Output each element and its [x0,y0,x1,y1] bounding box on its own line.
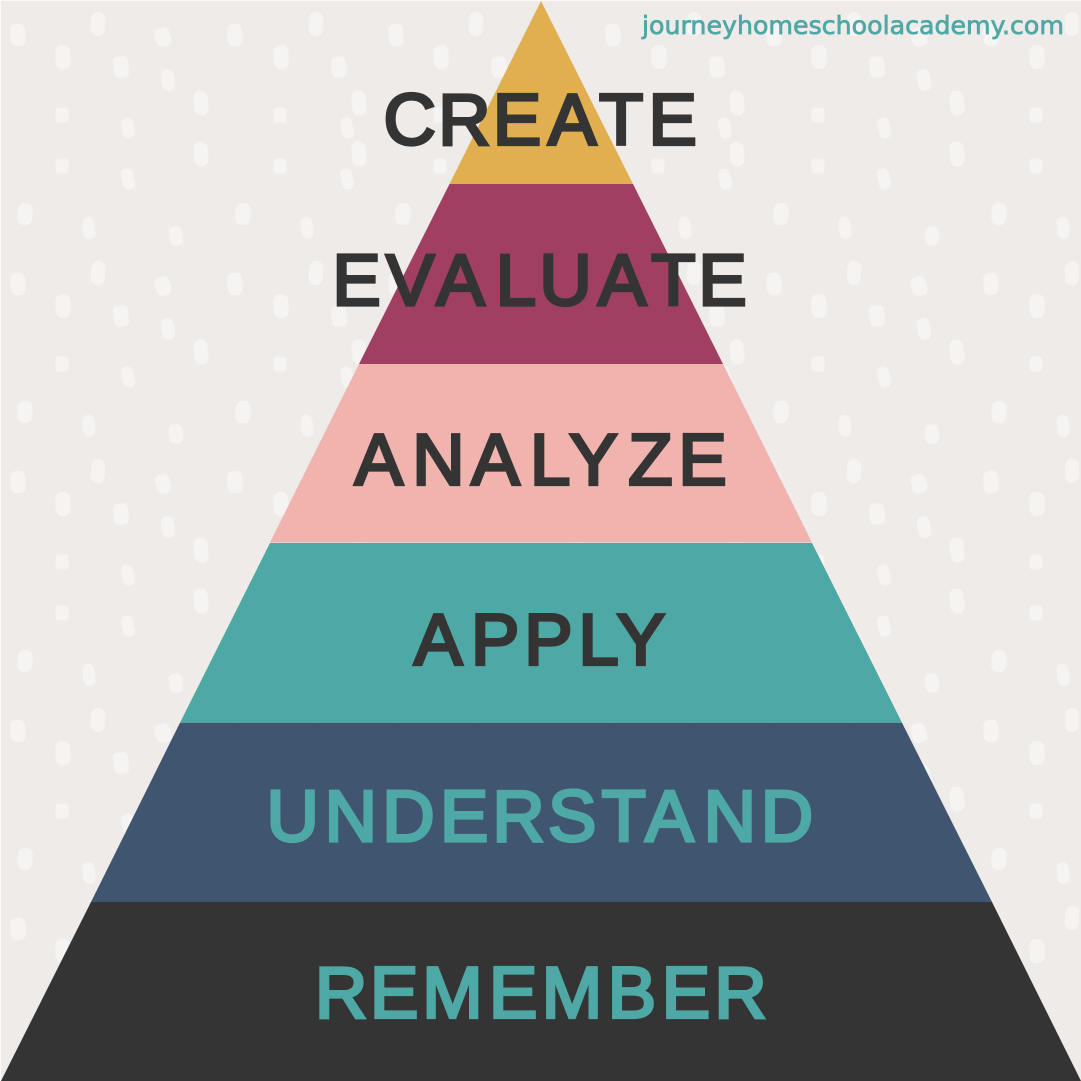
tier: apply [180,543,902,723]
label: understand: UNDERSTAND [266,776,813,857]
tier band: analyze [270,364,812,542]
tier: remember [1,902,1081,1081]
label: apply: APPLY [414,600,665,680]
tier band: evaluate [359,184,723,364]
tier band: create [450,1,633,184]
label: create: CREATE [384,80,697,160]
tier: analyze [270,364,812,542]
tier: evaluate [332,184,747,364]
tier band: apply [180,543,902,723]
label: analyze: ANALYZE [355,420,727,500]
label: remember: REMEMBER [315,952,767,1034]
label: evaluate: EVALUATE [332,240,747,321]
website url: journeyhomeschoolacademy.com [641,11,1064,40]
tier: understand [91,723,992,902]
tier band: remember [1,902,1081,1081]
tier: create [384,1,697,184]
tier band: understand [91,723,992,902]
